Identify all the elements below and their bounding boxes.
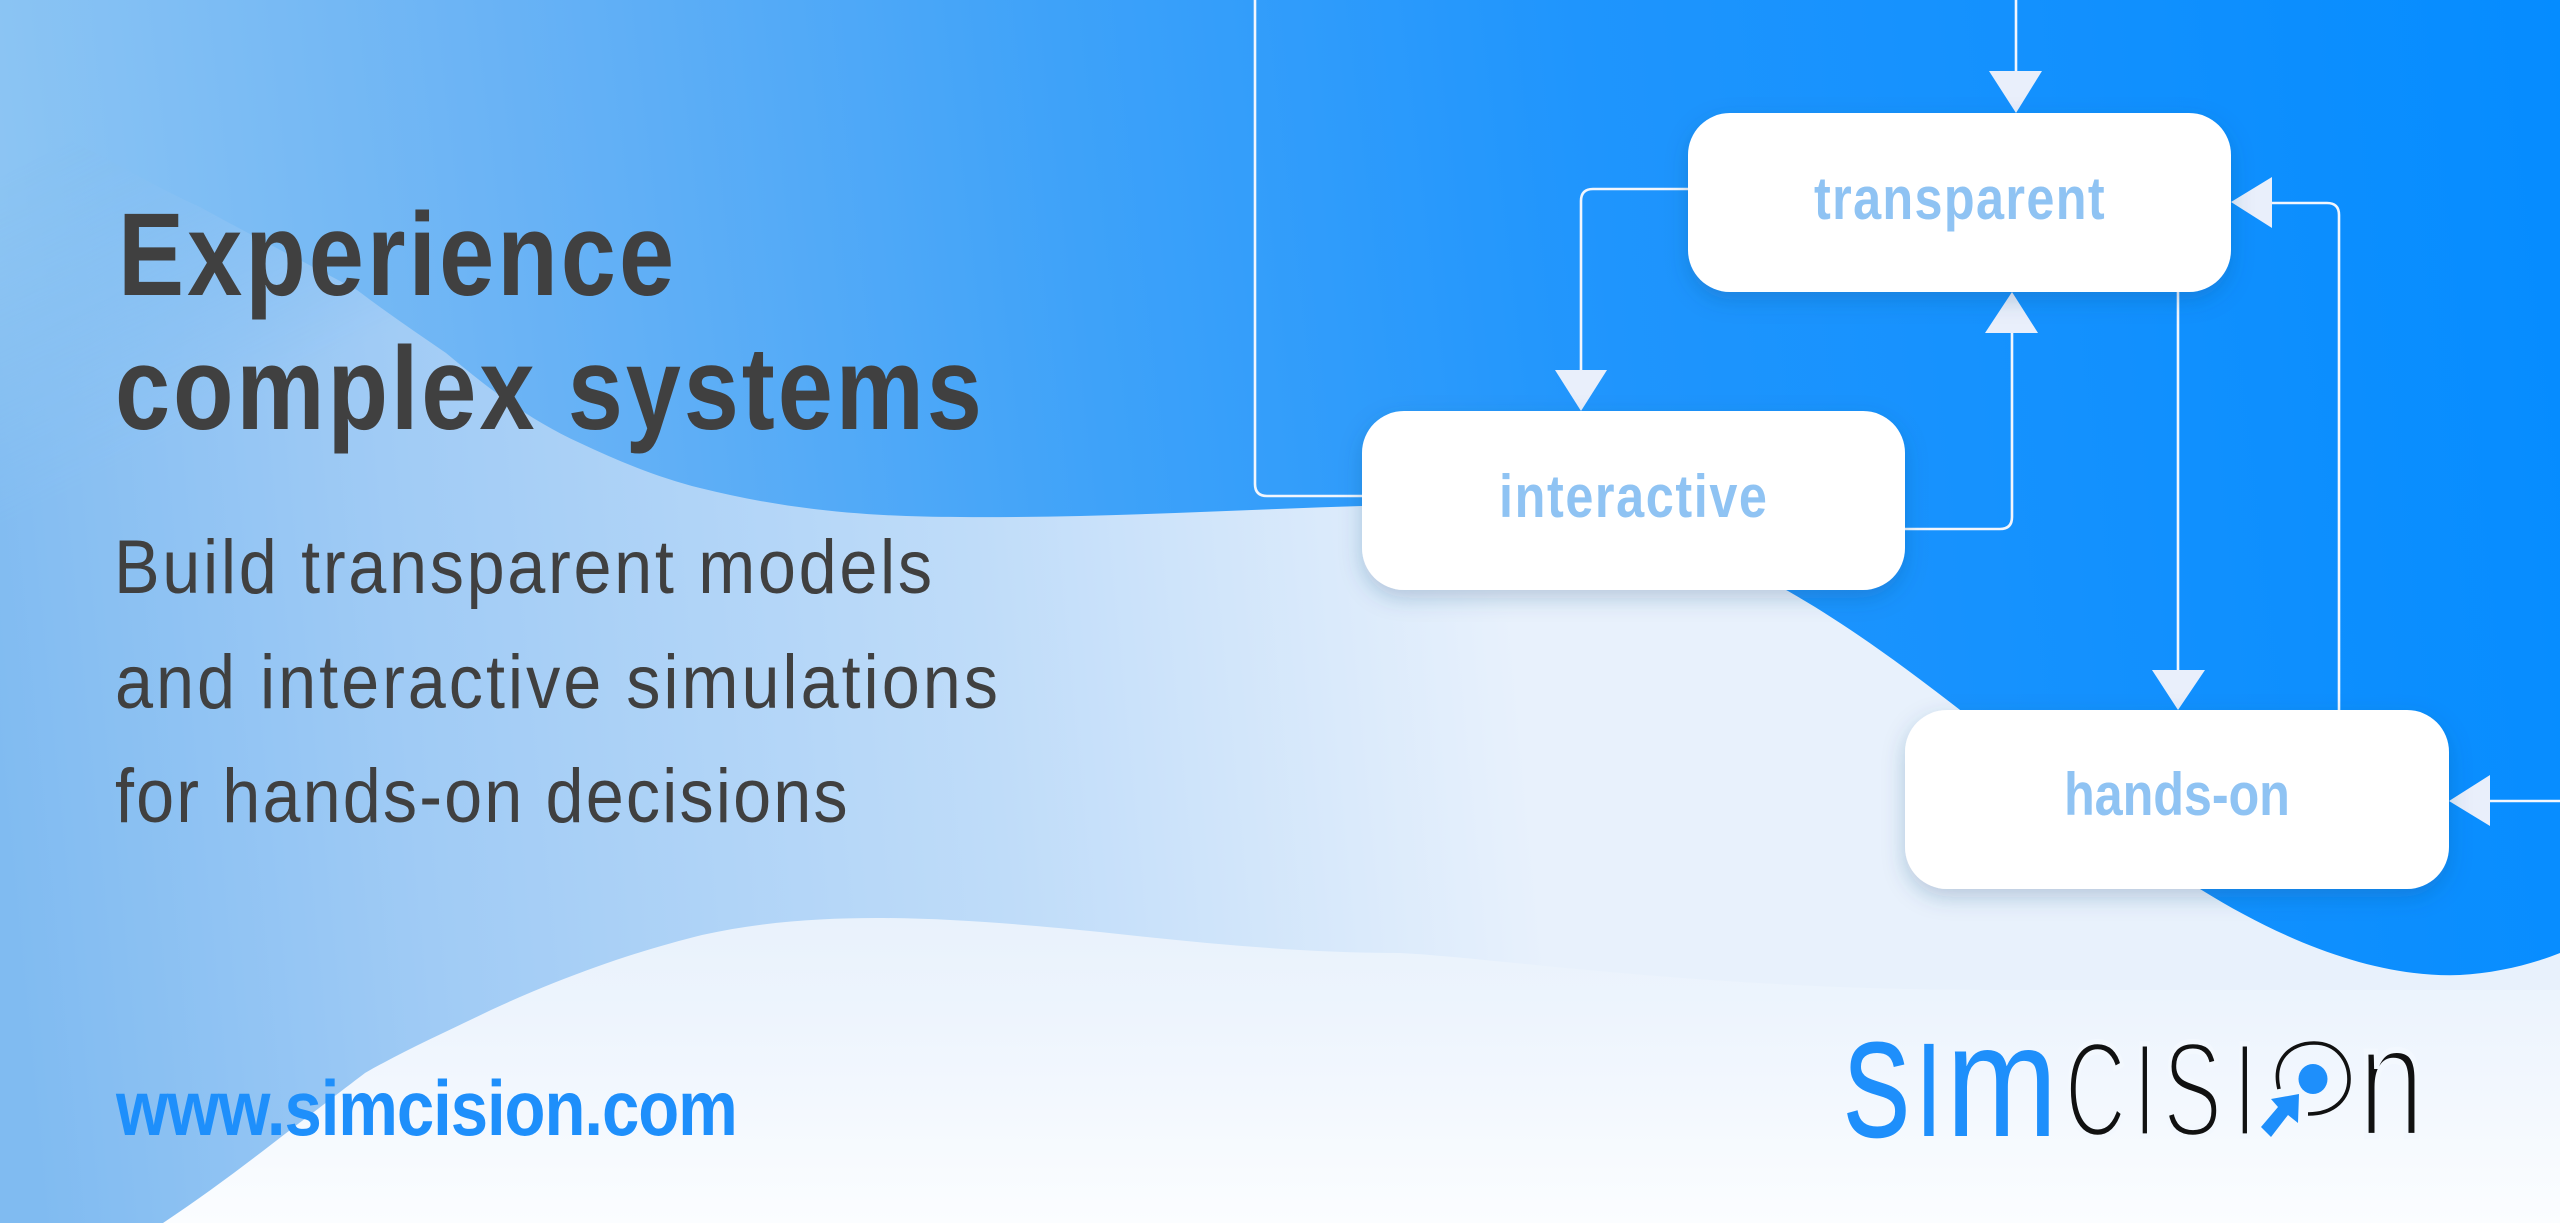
subtitle text block: for hands-on decisions <box>115 755 848 839</box>
node: interactive <box>1362 411 1905 590</box>
subtitle text block: Build transparent models <box>114 526 932 610</box>
logo: simcision <box>1844 991 2425 1171</box>
logo text: m: m <box>1946 992 2058 1171</box>
logo text: s: S <box>1844 1014 1910 1164</box>
logo icon: dot <box>2298 1064 2328 1094</box>
node: hands-on: hands-on <box>2064 761 2290 828</box>
bottom wave <box>163 918 2560 1223</box>
logo text: i: I <box>2234 1016 2256 1165</box>
subtitle text block: and interactive simulations <box>115 641 998 725</box>
arrow: hands-on to transparent <box>2231 177 2339 710</box>
logo text: s: S <box>2163 1015 2222 1166</box>
subtitle text block <box>114 526 998 839</box>
logo text: n: n <box>2358 991 2425 1170</box>
node: interactive: interactive <box>1499 463 1767 530</box>
logo icon: target ring <box>2277 1043 2349 1114</box>
node: transparent: transparent <box>1814 165 2105 232</box>
logo text: i: I <box>1915 1016 1943 1165</box>
arrow: transparent to hands-on <box>2152 292 2205 710</box>
arrow: interactive to top <box>1255 0 1362 496</box>
title: complex systems <box>115 323 982 455</box>
arrow: interactive to transparent <box>1905 292 2038 529</box>
website url: www.simcision.com <box>115 1065 738 1152</box>
arrow: right into hands-on <box>2449 775 2560 826</box>
title <box>115 189 982 455</box>
arrow: top into transparent <box>1989 0 2042 113</box>
logo text: c: C <box>2065 1014 2126 1165</box>
title: Experience <box>118 189 674 321</box>
arrow: transparent to interactive <box>1555 189 1688 411</box>
logo icon: arrow <box>2261 1094 2299 1137</box>
node: hands-on <box>1905 710 2449 889</box>
logo text: i: I <box>2134 1016 2156 1165</box>
node: transparent <box>1688 113 2231 292</box>
